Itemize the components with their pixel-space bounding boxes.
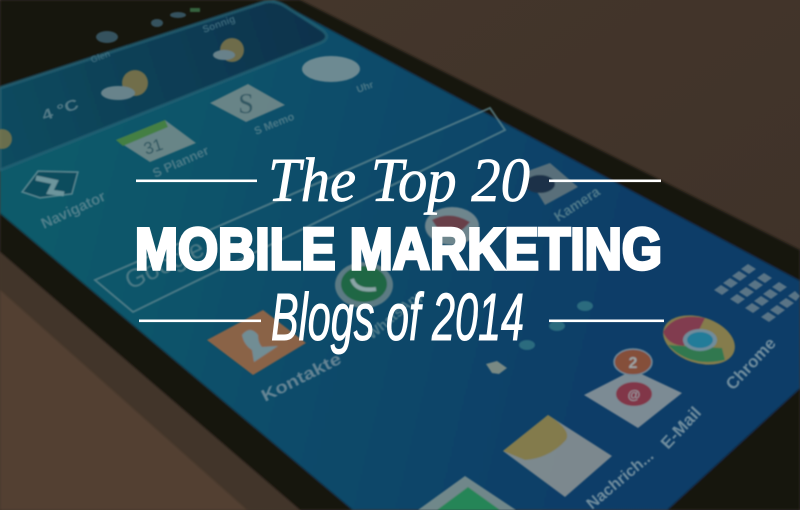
title line 3: Blogs of 2014 (271, 280, 524, 355)
label: Navigator: Navigator (39, 188, 109, 233)
rule: bottom right (549, 320, 664, 322)
icon: WhatsApp (335, 262, 393, 308)
label: Chrome: Chrome (722, 334, 780, 394)
icon: E-Mail: 2 (629, 355, 638, 372)
title line 1: The Top 20 (268, 147, 530, 215)
icon: Kontakte (207, 310, 306, 375)
headline (135, 147, 664, 355)
label: S Planner: S Planner (150, 143, 211, 181)
icon: weather cloud (101, 70, 148, 100)
icon: E-Mail (584, 349, 682, 428)
icon: Navigator (22, 171, 78, 198)
icon: S Planner calendar (116, 120, 196, 162)
icon: S Memo: S (238, 89, 254, 120)
icon: E-Mail: @ (628, 387, 640, 402)
icon: clock (302, 56, 360, 82)
icon: weather sun small (213, 38, 244, 62)
label: Humidity: Sonnig (201, 14, 237, 36)
label: temperature: 4 °C (40, 96, 81, 125)
icon: Chrome (657, 307, 741, 373)
rule: bottom left (139, 320, 261, 322)
icon: app grid (714, 264, 800, 322)
label: E-Mail: E-Mail (657, 403, 705, 453)
title line 2: MOBILE MARKETING (135, 217, 662, 282)
search bar (95, 108, 505, 312)
weather widget (0, 2, 327, 170)
icon: globe (425, 207, 479, 245)
icon: green app (418, 476, 516, 510)
icon: S Planner calendar: 31 (141, 135, 165, 159)
icon: sun left (0, 129, 12, 149)
rule: top right (549, 180, 661, 182)
label: WhatsApp: WhatsApp (364, 286, 427, 342)
icon: Kamera (525, 163, 578, 205)
phone side edge (0, 250, 300, 510)
icon: envelope (503, 415, 612, 497)
page indicator dots (519, 301, 593, 350)
wood lower left (0, 280, 260, 510)
label: Kontakte: Kontakte (258, 349, 344, 406)
label: Kamera: Kamera (551, 183, 603, 225)
rule: top left (136, 180, 257, 182)
search bar: Google (120, 233, 209, 295)
icon: S Memo (210, 84, 285, 122)
icon: home (486, 361, 507, 374)
label: Uhr: Uhr (355, 80, 375, 96)
label: S Memo: S Memo (253, 111, 296, 138)
status bar icons (96, 8, 200, 43)
label: city: Glen (89, 49, 111, 65)
